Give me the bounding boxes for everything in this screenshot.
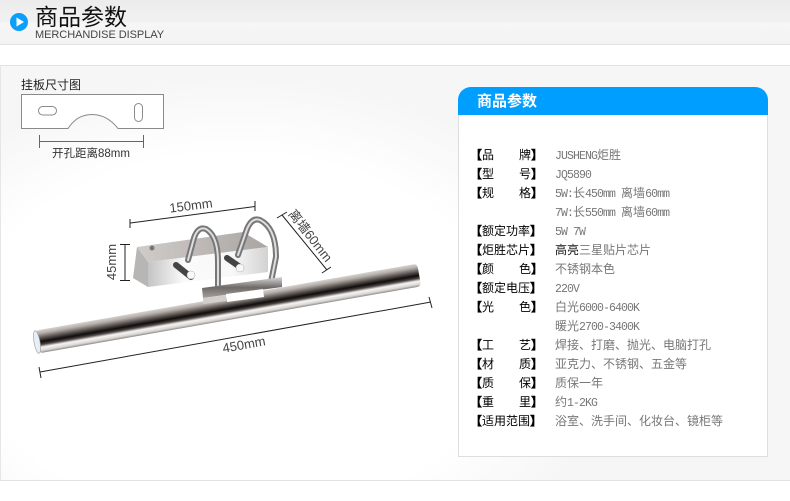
spec rows: 【适用范围】 xyxy=(470,412,542,429)
lamp photo with dimensions xyxy=(33,195,432,378)
spec rows: 约1-2KG xyxy=(555,393,597,410)
spec rows: 【额定电压】 xyxy=(470,279,542,296)
spec rows xyxy=(470,146,723,429)
spec rows: 质】 xyxy=(519,355,543,372)
spec rows: 【规 xyxy=(470,184,494,201)
icon: play button xyxy=(10,13,28,31)
mounting plate diagram xyxy=(21,78,164,160)
spec rows: 【质 xyxy=(470,374,494,391)
spec rows: 浴室、洗手间、化妆台、镜柜等 xyxy=(555,412,723,429)
spec rows: 号】 xyxy=(519,165,543,182)
spec rows: 【重 xyxy=(470,393,494,410)
panel: specification card xyxy=(458,87,768,457)
backplate xyxy=(133,232,268,287)
spec rows: 高亮三星贴片芯片 xyxy=(555,241,651,258)
spec rows: 格】 xyxy=(519,184,543,201)
dimension: 150mm: 150mm xyxy=(169,195,213,216)
spec rows: 艺】 xyxy=(519,336,543,353)
card title: 商品参数 xyxy=(477,90,537,111)
spec rows: 色】 xyxy=(519,298,543,315)
spec rows: 【光 xyxy=(470,298,494,315)
subheading: MERCHANDISE DISPLAY xyxy=(35,29,164,41)
plate title: 挂板尺寸图 xyxy=(21,78,81,92)
lamp tube xyxy=(32,264,421,354)
spec rows: 暖光2700-3400K xyxy=(555,317,639,334)
spec rows: 亚克力、不锈钢、五金等 xyxy=(555,355,687,372)
spec rows: 保】 xyxy=(519,374,543,391)
dimension: 450mm xyxy=(39,297,432,378)
spec rows: JUSHENG炬胜 xyxy=(555,146,621,163)
header band xyxy=(0,0,790,45)
plate dimension label: 开孔距离88mm xyxy=(52,148,130,160)
dimension: 45mm xyxy=(104,244,130,280)
spec rows: 【工 xyxy=(470,336,494,353)
spec rows: 【材 xyxy=(470,355,494,372)
spec rows: 7W:长550mm 离墙60mm xyxy=(555,203,669,220)
dimension: 450mm: 450mm xyxy=(221,333,267,356)
lamp arms xyxy=(176,219,276,288)
spec rows: 里】 xyxy=(519,393,543,410)
spec rows: 牌】 xyxy=(519,146,543,163)
spec rows: 【型 xyxy=(470,165,494,182)
spec rows: 5W 7W xyxy=(555,226,585,239)
spec rows: 【颜 xyxy=(470,260,494,277)
spec rows: JQ5890 xyxy=(555,169,591,182)
spec rows: 【炬胜芯片】 xyxy=(470,241,542,258)
dimension: 150mm xyxy=(130,195,255,228)
dimension: 45mm: 45mm xyxy=(104,244,119,280)
spec rows: 焊接、打磨、抛光、电脑打孔 xyxy=(555,336,711,353)
dimension: 60mm from wall: 离墙60mm xyxy=(285,207,335,265)
heading: 商品参数: 商品参数 xyxy=(35,4,127,30)
spec rows: 色】 xyxy=(519,260,543,277)
plate outline drawing xyxy=(21,94,164,148)
spec rows: 白光6000-6400K xyxy=(555,298,639,315)
spec rows: 不锈钢本色 xyxy=(555,260,615,277)
spec rows: 220V xyxy=(555,283,579,296)
spec rows: 【品 xyxy=(470,146,494,163)
spec rows: 【额定功率】 xyxy=(470,222,542,239)
spec rows: 质保一年 xyxy=(555,374,603,391)
arm end caps xyxy=(187,264,244,279)
spec rows: 5W:长450mm 离墙60mm xyxy=(555,184,669,201)
bracket xyxy=(202,277,282,304)
card header xyxy=(458,87,768,115)
